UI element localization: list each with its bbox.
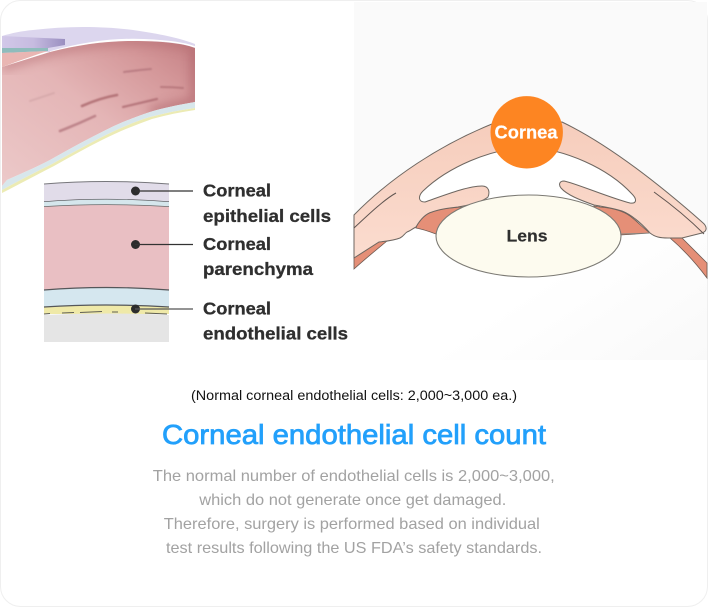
label: lens: Lens (506, 226, 548, 246)
lavender epithelium layer (2, 27, 195, 53)
corneal stroma (2, 41, 195, 186)
text block: description: test results following the US FDA’s safety standards. (166, 540, 542, 557)
heading: Corneal endothelial cell count (162, 419, 546, 450)
callout: epithelial marker (131, 186, 193, 196)
light blue endothelial band (2, 102, 195, 190)
endothelial layer (44, 305, 169, 314)
highlight (50, 40, 195, 52)
ciliary muscle left (416, 207, 470, 240)
icon: lens (436, 195, 621, 277)
text block: description: Therefore, surgery is performed based on individual (164, 516, 540, 533)
eye interior (354, 122, 707, 360)
lens ligament right (618, 233, 650, 234)
text block: description: The normal number of endothelial cells is 2,000~3,000, (153, 468, 555, 485)
descemet layer (44, 288, 169, 307)
callout: parenchyma marker (131, 240, 193, 249)
epithelial layer (44, 182, 169, 202)
label: corneal endothelial cells: Corneal (203, 298, 271, 318)
callout: endothelial marker (131, 304, 193, 314)
label: corneal endothelial cells: endothelial cells (203, 324, 348, 344)
anterior chamber (44, 316, 169, 342)
sclera muscle right (670, 238, 707, 278)
stroma shading (2, 41, 195, 112)
sclera muscle left (354, 241, 387, 269)
cornea, sclera and iris (354, 122, 706, 258)
sclera slit left (354, 193, 396, 228)
pink wedge under teal (2, 51, 48, 67)
label: cornea: Cornea (494, 122, 559, 142)
panel: eye anatomy diagram (354, 2, 707, 360)
text block: description: which do not generate once get damaged. (198, 492, 506, 509)
ciliary muscle right (590, 206, 650, 235)
stroma streaks (30, 69, 183, 131)
parenchyma layer (44, 205, 169, 290)
teal band (2, 48, 48, 53)
bowman layer (44, 200, 169, 207)
panel: corneal layers detail (44, 182, 169, 342)
label: corneal parenchyma: parenchyma (203, 259, 313, 279)
sclera slit right (654, 192, 704, 234)
label: corneal epithelial cells: epithelial cells (203, 206, 331, 226)
icon: cornea badge (490, 96, 563, 168)
panel: corneal cross-section illustration (2, 27, 195, 193)
yellow edge (2, 108, 195, 193)
label: corneal epithelial cells: Corneal (203, 180, 271, 200)
caption: normal cell count: (Normal corneal endothelial cells: 2,000~3,000 ea.) (191, 388, 517, 403)
purple cut face (2, 36, 65, 48)
label: corneal parenchyma: Corneal (203, 234, 271, 254)
